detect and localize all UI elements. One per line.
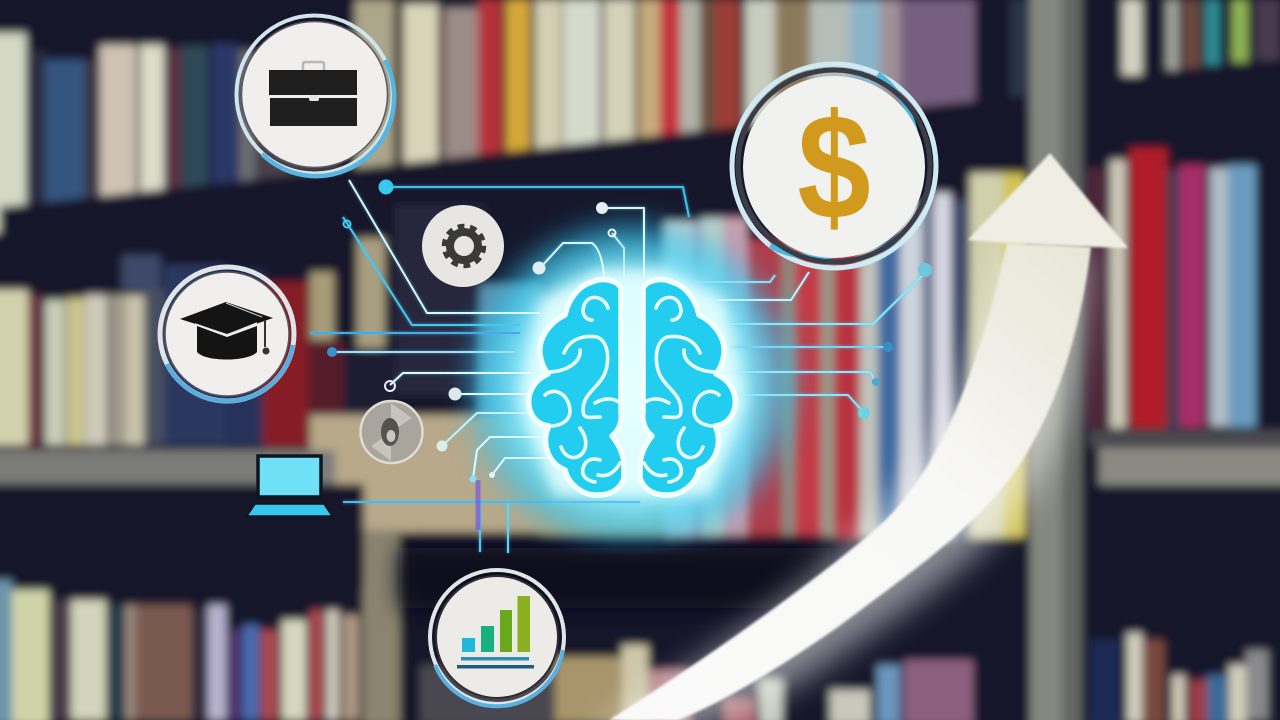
arrow shaft	[609, 243, 1091, 720]
brain glow	[460, 213, 804, 557]
arrow head	[968, 153, 1128, 248]
bottom row books, middle	[420, 645, 973, 720]
second row, left	[0, 205, 540, 447]
middle cream books under brain	[310, 415, 560, 533]
right circuit lines	[693, 272, 926, 413]
right section	[1085, 0, 1280, 720]
circuit end nodes	[327, 180, 932, 482]
white aura around brain	[520, 270, 745, 495]
icon: laptop	[247, 456, 332, 516]
dollar sign: $	[797, 83, 871, 250]
icon: bar chart in circle	[430, 570, 564, 706]
pillar	[1030, 0, 1082, 720]
icon: briefcase in circle	[236, 16, 394, 176]
brain icon	[529, 280, 735, 495]
icon: graduation cap in circle	[160, 267, 294, 401]
arrow shaft halo	[590, 250, 1091, 720]
icon: gear in circle	[422, 205, 504, 287]
top shelf	[0, 95, 1028, 255]
circuit lines	[310, 180, 926, 553]
top row of books, left	[0, 0, 1030, 233]
circuit line glow	[310, 180, 926, 553]
second row, right	[665, 173, 1025, 537]
bottom row books, left	[0, 580, 359, 720]
icon: dollar in circle	[732, 64, 936, 268]
left circuit lines	[310, 180, 640, 553]
dark shelf under glow	[400, 548, 830, 608]
icon: bug coin	[360, 401, 422, 463]
top circuit lines	[386, 187, 689, 280]
lower grey shelf, left	[0, 450, 335, 484]
upward growth arrow	[590, 153, 1128, 720]
brain right hemisphere	[640, 280, 735, 495]
brain left hemisphere	[529, 280, 624, 495]
